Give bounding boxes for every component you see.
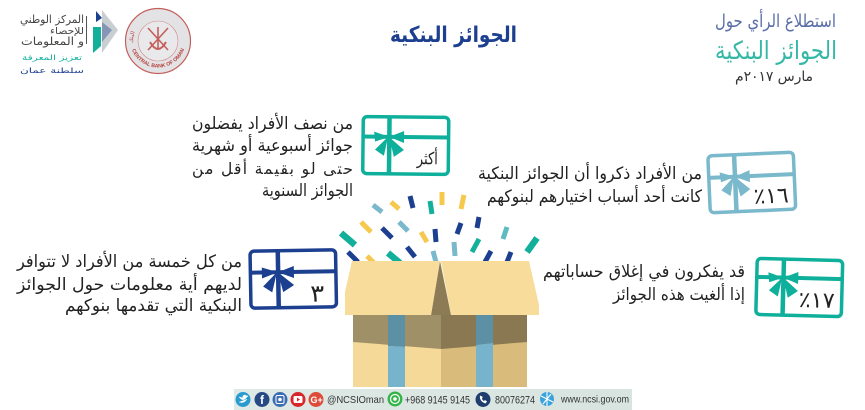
gift card: 16 percent: ٪١٦ <box>753 183 789 210</box>
logo: Central Bank of Oman: CENTRAL BANK OF OMAN <box>132 48 184 68</box>
phone number: 80076274 <box>495 394 535 406</box>
text: 16 percent mentioned prizes as a reason <box>478 162 703 207</box>
text: more than half prefer weekly or monthly prizes: الجوائز السنوية <box>262 181 353 201</box>
whatsapp number: +968 9145 9145 <box>405 394 470 406</box>
icon: twitter <box>236 392 250 407</box>
text: more than half prefer weekly or monthly prizes <box>192 113 353 201</box>
icon: google plus: G+ <box>310 395 323 405</box>
icon: phone <box>476 392 490 407</box>
gift card: 17 percent <box>755 258 843 317</box>
text: may close accounts if prizes are cancelled: قد يفكرون في إغلاق حساباتهم <box>543 262 745 282</box>
logo: NCSI <box>20 10 118 75</box>
confetti <box>341 192 537 263</box>
text: more than half prefer weekly or monthly prizes: حتى لو بقيمة أقل من <box>192 158 353 178</box>
gift card: more than half: أكثر <box>416 147 438 169</box>
header block: survey title and date <box>715 9 837 85</box>
gift card: 17 percent: ٪١٧ <box>798 288 835 314</box>
open cardboard box <box>345 261 539 387</box>
logo: NCSI: و المعلومات <box>21 35 84 48</box>
text: 16 percent mentioned prizes as a reason: من الأفراد ذكروا أن الجوائز البنكية <box>478 162 702 184</box>
header block: survey title and date: استطلاع الرأي حول <box>715 9 836 32</box>
text: 16 percent mentioned prizes as a reason: كانت أحد أسباب اختيارهم لبنوكهم <box>487 185 703 207</box>
text: information about prizes: لديهم أية معلومات حول الجوائز <box>16 273 242 295</box>
header block: survey title and date: الجوائز البنكية <box>715 36 837 65</box>
logo: Central Bank of Oman <box>124 8 192 74</box>
gift card: 16 percent <box>708 152 796 213</box>
gift card: 3 of 5 <box>250 249 336 309</box>
gift card: more than half <box>363 117 449 174</box>
logo: NCSI: تعزيز المعرفة <box>22 53 82 62</box>
icon: facebook <box>254 392 270 407</box>
text: may close accounts if prizes are cancelled <box>543 262 745 305</box>
icon: instagram <box>272 392 288 407</box>
text: information about prizes: البنكية التي تقدمها بنوكهم <box>65 296 242 316</box>
icon: youtube <box>290 392 306 407</box>
icon: globe <box>540 392 554 406</box>
title: الجوائز البنكية <box>390 23 517 48</box>
logo: NCSI: للإحصاء <box>50 26 84 37</box>
icon: google plus <box>308 392 324 407</box>
gift card: 3 of 5: ٣ <box>310 279 325 308</box>
website: www.ncsi.gov.om <box>560 394 629 406</box>
text: more than half prefer weekly or monthly prizes: من نصف الأفراد يفضلون <box>192 113 353 134</box>
logo: NCSI: سلطنة عمان <box>20 66 84 75</box>
text: information about prizes <box>16 251 242 316</box>
text: may close accounts if prizes are cancelled: إذا ألغيت هذه الجوائز <box>612 283 745 305</box>
icon: facebook: f <box>260 393 265 407</box>
icon: whatsapp <box>388 392 402 406</box>
text: information about prizes: من كل خمسة من الأفراد لا تتوافر <box>16 251 242 272</box>
header block: survey title and date: مارس ٢٠١٧م <box>735 69 813 85</box>
text: more than half prefer weekly or monthly prizes: جوائز أسبوعية أو شهرية <box>192 134 353 156</box>
handle: @NCSIOman <box>327 394 384 406</box>
footer: contact bar <box>234 389 632 410</box>
logo: NCSI: المركز الوطني <box>20 13 84 26</box>
